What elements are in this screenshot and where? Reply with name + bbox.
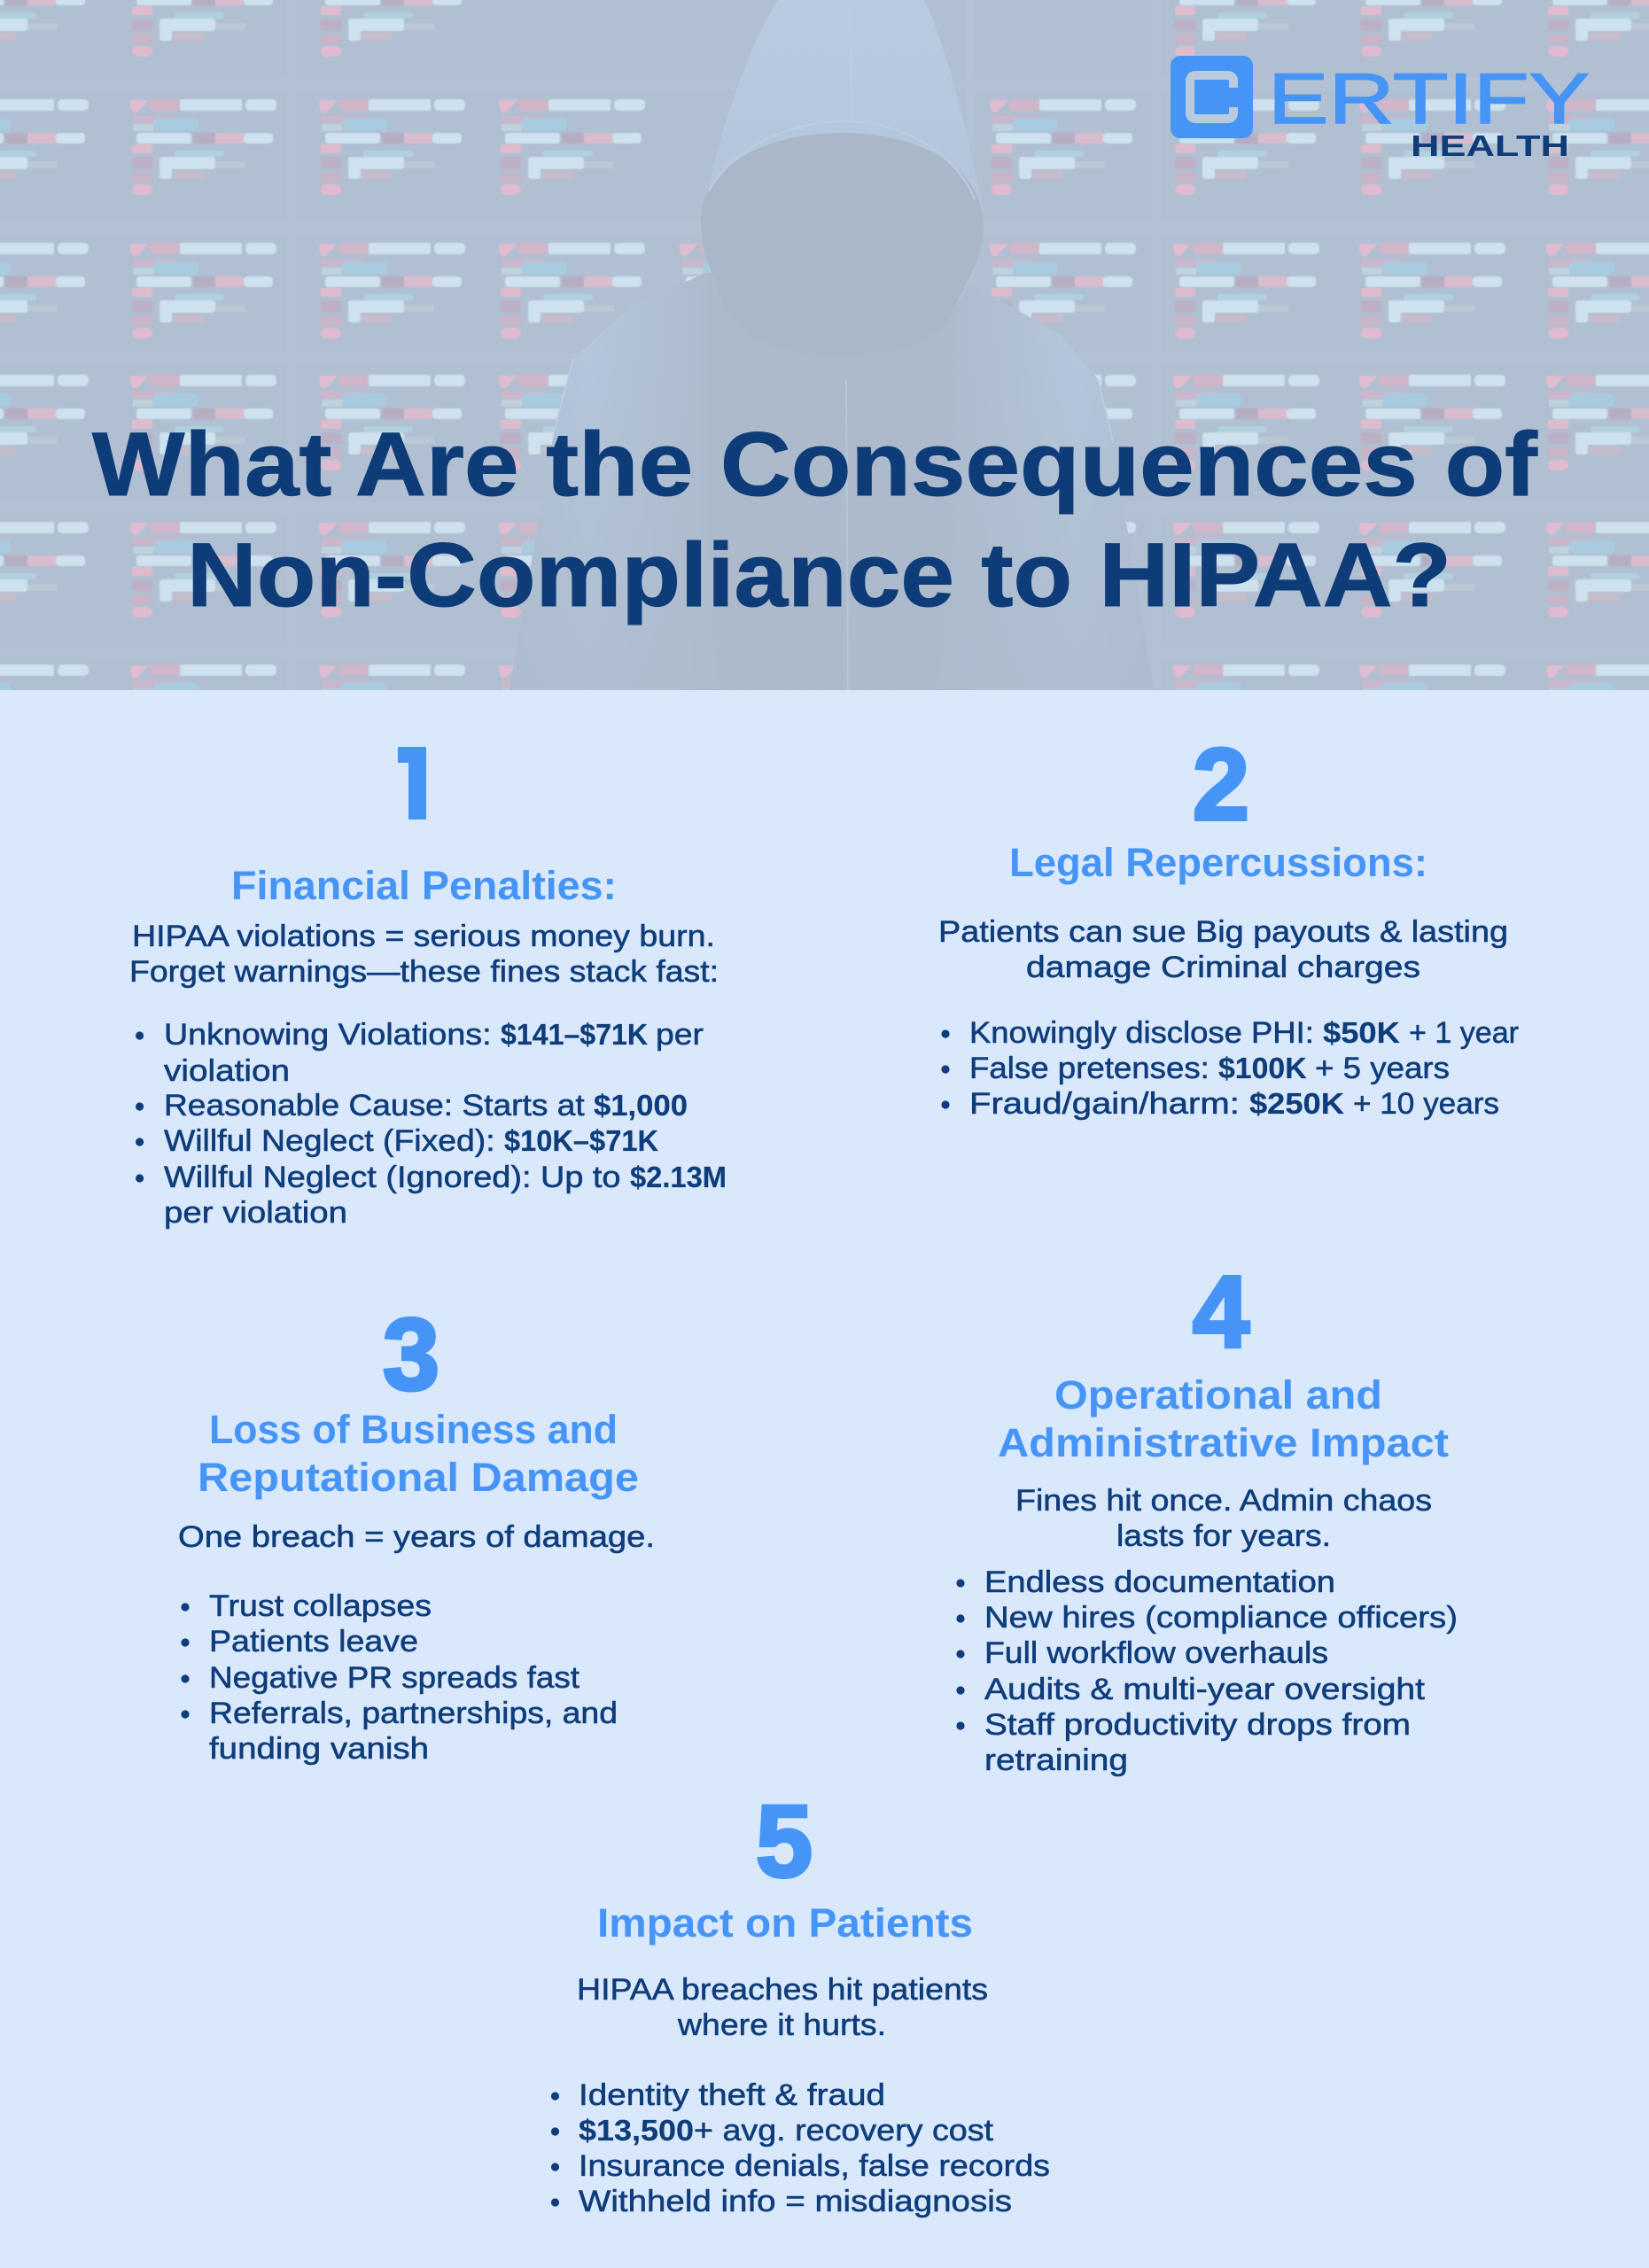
bullet list: $13,500 <box>579 2114 694 2147</box>
intro text: HIPAA violations = serious money burn. <box>132 920 715 953</box>
panel: operational and administrative impact <box>956 1255 1458 1777</box>
bullet list: $141–$71K <box>501 1018 656 1051</box>
bullet list: per violation <box>164 1196 347 1230</box>
bullet list: Patients leave <box>209 1625 418 1658</box>
intro text: lasts for years. <box>1116 1519 1331 1553</box>
number 3: 3 <box>383 1298 439 1411</box>
number 1 <box>398 747 426 819</box>
intro text: Forget warnings—these fines stack fast: <box>129 955 719 989</box>
bullet list <box>181 1589 618 1766</box>
logo subtitle: HEALTH <box>1411 129 1569 162</box>
bullet list: False pretenses: <box>969 1052 1218 1085</box>
bullet list: New hires (compliance officers) <box>984 1601 1458 1635</box>
bullet list: Trust collapses <box>209 1589 432 1623</box>
bullet list <box>136 1018 727 1230</box>
heading: operational impact <box>998 1372 1449 1465</box>
bullet list: Insurance denials, false records <box>579 2149 1050 2183</box>
bullet list: Staff productivity drops from <box>984 1708 1411 1742</box>
bullet list: Fraud/gain/harm: <box>969 1087 1249 1121</box>
intro text: where it hurts. <box>677 2008 886 2042</box>
bullet list: Identity theft & fraud <box>579 2078 885 2112</box>
bullet list: Reasonable Cause: Starts at <box>164 1089 594 1122</box>
heading: loss of business <box>198 1407 639 1500</box>
intro text: damage Criminal charges <box>1026 951 1420 984</box>
intro text: Patients can sue Big payouts & lasting <box>938 915 1508 949</box>
bullet list <box>941 1016 1519 1121</box>
heading: loss of business: Reputational Damage <box>198 1455 639 1500</box>
bullet list: Endless documentation <box>984 1565 1335 1599</box>
bullet list: Withheld info = misdiagnosis <box>579 2185 1012 2218</box>
bullet list: $1,000 <box>594 1089 688 1122</box>
bullet list: + 1 year <box>1409 1016 1519 1050</box>
intro text <box>577 1973 988 2042</box>
bullet list <box>551 2078 1050 2218</box>
bullet list: Willful Neglect (Fixed): <box>164 1124 504 1158</box>
panel: header photo background <box>0 0 1649 760</box>
bullet list <box>956 1565 1458 1777</box>
logo: Certify Health <box>1171 56 1590 162</box>
number 4: 4 <box>1193 1255 1249 1369</box>
panel: legal repercussions <box>938 728 1519 1121</box>
bullet list: Unknowing Violations: <box>164 1018 501 1052</box>
panel: financial penalties <box>129 728 727 1230</box>
icon: hooded figure <box>509 0 1154 690</box>
bullet list: $100K <box>1218 1052 1315 1084</box>
bullet list: retraining <box>984 1744 1128 1777</box>
bullet list: Full workflow overhauls <box>984 1636 1328 1670</box>
bullet list: per <box>656 1018 704 1052</box>
heading: operational impact: Administrative Impact <box>998 1420 1449 1465</box>
bullet list: $10K–$71K <box>504 1124 658 1157</box>
heading: financial penalties: Financial Penalties: <box>231 863 617 908</box>
title: Non-Compliance to HIPAA? <box>187 524 1451 625</box>
bullet list: Knowingly disclose PHI: <box>969 1016 1323 1050</box>
panel: impact on patients <box>551 1785 1050 2218</box>
title: What Are the Consequences of <box>92 414 1538 515</box>
intro text: HIPAA breaches hit patients <box>577 1973 988 2007</box>
bullet list: violation <box>164 1054 290 1088</box>
intro text <box>1015 1484 1432 1553</box>
intro text: One breach = years of damage. <box>178 1520 655 1554</box>
bullet list: $2.13M <box>630 1161 727 1193</box>
bullet list: + 10 years <box>1353 1087 1499 1121</box>
number 2: 2 <box>1193 728 1249 842</box>
number 5: 5 <box>756 1785 813 1899</box>
bullet list: Audits & multi-year oversight <box>984 1673 1426 1706</box>
heading: impact on patients: Impact on Patients <box>597 1900 973 1946</box>
heading: operational impact: Operational and <box>1054 1372 1382 1418</box>
logo wordmark: ERTIFY <box>1268 59 1590 139</box>
bullet list: $250K <box>1249 1087 1353 1120</box>
panel: loss of business and reputational damage <box>178 1298 655 1766</box>
icon: C mark <box>1171 56 1253 138</box>
bullet list: Negative PR spreads fast <box>209 1661 580 1695</box>
bullet list: $50K <box>1323 1016 1409 1049</box>
bullet list: funding vanish <box>209 1732 429 1766</box>
intro text: Fines hit once. Admin chaos <box>1015 1484 1432 1518</box>
bullet list: + 5 years <box>1315 1052 1450 1085</box>
intro text <box>938 915 1508 984</box>
bullet list: + avg. recovery cost <box>694 2114 994 2148</box>
bullet list: Referrals, partnerships, and <box>209 1697 618 1730</box>
heading: legal repercussions: Legal Repercussions: <box>1009 840 1427 885</box>
heading: loss of business: Loss of Business and <box>209 1407 618 1452</box>
title <box>92 414 1538 625</box>
intro text <box>129 920 719 989</box>
bullet list: Willful Neglect (Ignored): Up to <box>164 1161 630 1194</box>
number 1: 1 <box>388 728 445 842</box>
